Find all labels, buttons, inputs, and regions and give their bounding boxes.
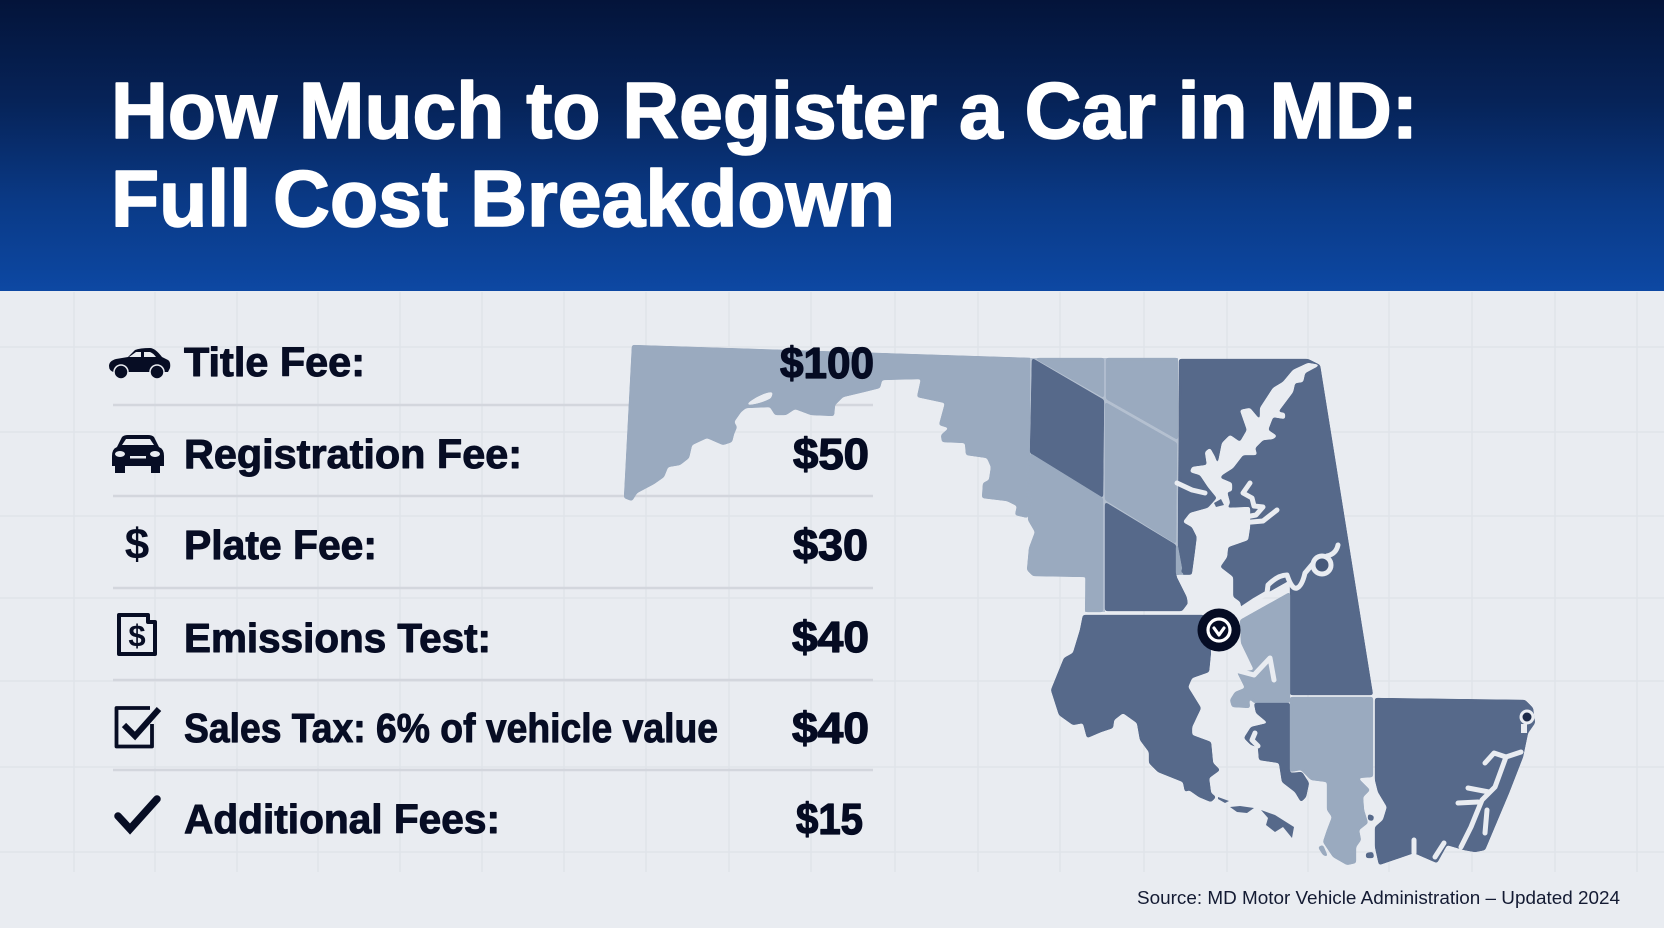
map: mid shore counties bbox=[1230, 592, 1373, 865]
row: emissions test: Emissions Test: bbox=[184, 615, 491, 661]
title bbox=[111, 66, 1418, 243]
row: title fee: $100 bbox=[780, 339, 874, 388]
header banner bbox=[0, 0, 1664, 291]
row: registration fee: $50 bbox=[793, 430, 869, 479]
row: sales tax: Sales Tax: 6% of vehicle value bbox=[184, 705, 718, 751]
map: southern counties bbox=[1051, 615, 1220, 802]
row: plate fee bbox=[125, 520, 868, 570]
map of Maryland bbox=[624, 345, 1535, 865]
icon: car side view bbox=[109, 348, 170, 379]
icon: car front view bbox=[112, 435, 164, 473]
icon: location marker bbox=[1198, 608, 1240, 652]
row: additional fees: Additional Fees: bbox=[184, 796, 500, 842]
title: Full Cost Breakdown bbox=[111, 154, 895, 243]
row: plate fee: $30 bbox=[793, 521, 868, 570]
row: title fee: Title Fee: bbox=[184, 339, 365, 385]
icon: checkbox bbox=[116, 708, 159, 746]
map: western counties bbox=[624, 345, 1032, 518]
row: emissions test bbox=[119, 613, 869, 662]
row: registration fee: Registration Fee: bbox=[184, 431, 522, 477]
row: registration fee bbox=[112, 430, 869, 479]
row: plate fee: Plate Fee: bbox=[184, 522, 377, 568]
row: additional fees: $15 bbox=[796, 795, 863, 844]
map: upper eastern shore and bay bbox=[1176, 359, 1373, 695]
source note: Source: MD Motor Vehicle Administration – Updated 2024 bbox=[1137, 887, 1620, 908]
icon: document with dollar sign: $ bbox=[128, 618, 146, 653]
title: How Much to Register a Car in MD: bbox=[111, 66, 1418, 155]
icon: document with dollar sign bbox=[119, 615, 155, 654]
map: lower eastern shore bbox=[1366, 698, 1535, 865]
map: central counties bbox=[1027, 358, 1195, 612]
row: sales tax: $40 bbox=[792, 704, 869, 753]
map: islands bbox=[1218, 797, 1294, 838]
row: additional fees bbox=[118, 795, 863, 844]
row: title fee bbox=[109, 339, 874, 388]
row: emissions test: $40 bbox=[792, 613, 869, 662]
icon: small marker on coast bbox=[1521, 711, 1533, 733]
icon: dollar sign: $ bbox=[125, 520, 149, 569]
icon: check mark bbox=[118, 799, 157, 829]
